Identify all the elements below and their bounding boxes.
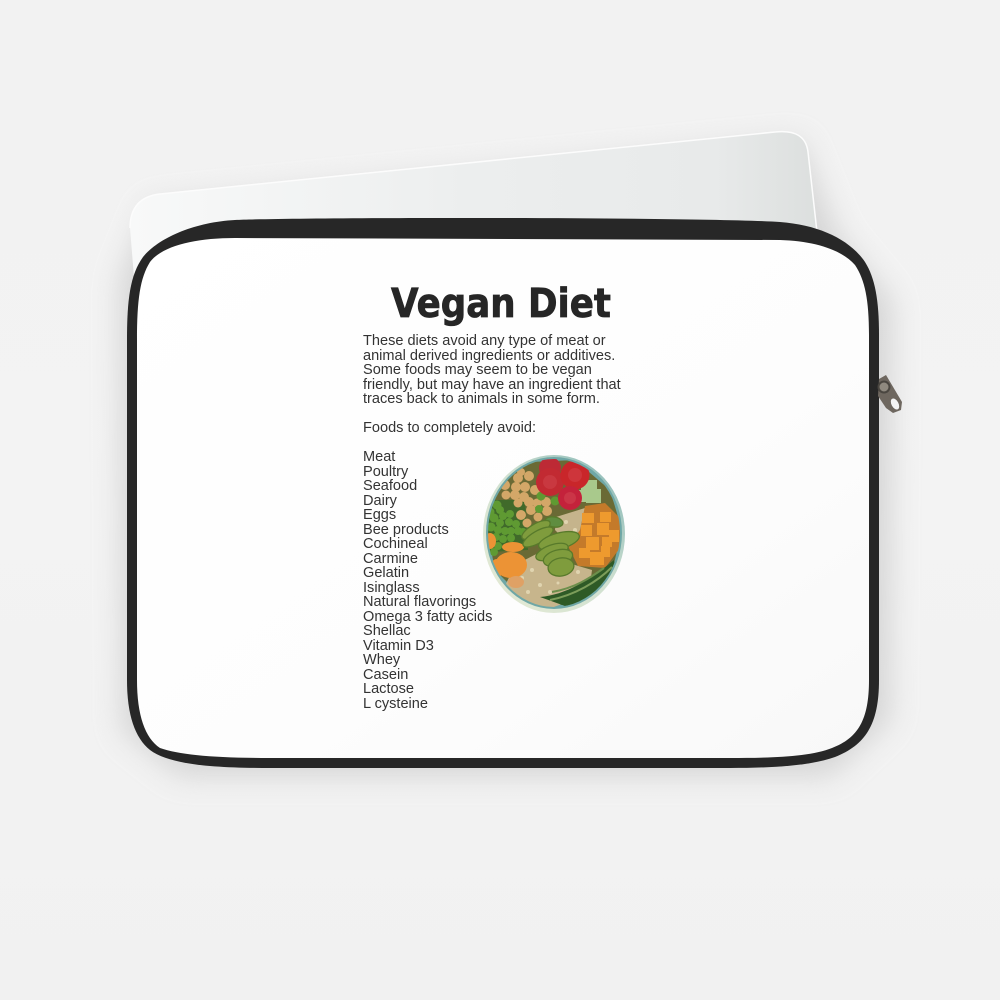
list of foods to avoid: L cysteine (363, 696, 428, 712)
intro paragraph: animal derived ingredients or additives. (363, 348, 615, 364)
bowl (483, 455, 625, 613)
list of foods to avoid: Gelatin (363, 565, 409, 581)
list of foods to avoid: Lactose (363, 681, 414, 697)
zipper pull (878, 375, 902, 413)
list of foods to avoid: Dairy (363, 492, 397, 508)
carrot slices (484, 533, 527, 588)
food base (488, 460, 622, 606)
list of foods to avoid: Poultry (363, 464, 408, 480)
title: Vegan Diet (391, 281, 611, 327)
shadows under sleeve and laptop (120, 140, 892, 776)
list of foods to avoid: Seafood (363, 478, 417, 494)
quinoa (506, 554, 592, 607)
list of foods to avoid: Eggs (363, 507, 396, 523)
laptop sleeve (127, 218, 879, 768)
list of foods to avoid: Natural flavorings (363, 594, 476, 610)
list of foods to avoid: Carmine (363, 550, 418, 566)
chickpeas (500, 468, 552, 528)
tomatoes (536, 457, 590, 510)
cucumber (579, 480, 601, 503)
laptop peeking out of the sleeve (130, 132, 817, 290)
list of foods to avoid: Shellac (363, 623, 411, 639)
list of foods to avoid: Meat (363, 449, 395, 465)
foods to avoid heading: Foods to completely avoid: (363, 420, 536, 436)
peas (486, 492, 560, 556)
intro paragraph: These diets avoid any type of meat or (363, 333, 606, 349)
roasted squash cubes (568, 503, 620, 568)
food bowl photo (483, 455, 625, 613)
sleeve white fabric panel (137, 238, 869, 758)
intro paragraph (363, 333, 621, 407)
list of foods to avoid: Isinglass (363, 580, 420, 596)
list of foods to avoid: Casein (363, 666, 408, 682)
sleeve black binding (127, 218, 879, 768)
intro paragraph: friendly, but may have an ingredient that (363, 376, 621, 392)
list of foods to avoid: Vitamin D3 (363, 638, 434, 654)
avocado slices (519, 516, 581, 578)
list of foods to avoid: Omega 3 fatty acids (363, 608, 492, 624)
list of foods to avoid (363, 449, 492, 712)
list of foods to avoid: Cochineal (363, 536, 428, 552)
intro paragraph: Some foods may seem to be vegan (363, 362, 592, 378)
intro paragraph: traces back to animals in some form. (363, 391, 600, 407)
leafy greens (540, 560, 615, 606)
list of foods to avoid: Bee products (363, 522, 449, 538)
list of foods to avoid: Whey (363, 652, 400, 668)
